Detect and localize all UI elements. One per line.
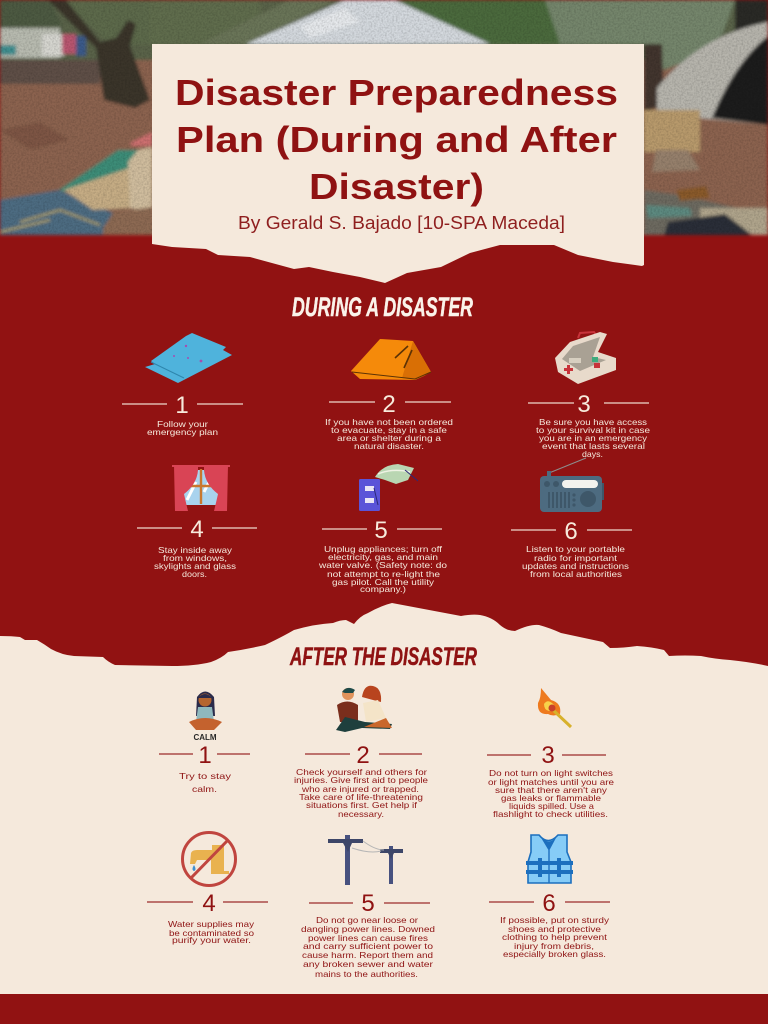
- step 3: survival kit: [528, 332, 650, 459]
- text: days.: [582, 449, 603, 459]
- text: you are in an emergency: [539, 433, 648, 443]
- text: clothing to help prevent: [502, 932, 608, 942]
- icon: two people giving first aid: [336, 686, 392, 732]
- text: necessary.: [338, 809, 384, 819]
- panel: after the disaster, cream area with torn top edge: [0, 603, 768, 994]
- number 6: 6: [542, 890, 556, 917]
- heading: during a disaster: DURING A DISASTER: [292, 292, 473, 322]
- heading: after the disaster: AFTER THE DISASTER: [289, 643, 477, 671]
- text: [500, 915, 610, 959]
- title: [175, 72, 618, 207]
- text: [147, 419, 218, 437]
- text: from windows,: [163, 553, 227, 563]
- text: radio for important: [534, 553, 618, 563]
- text: [154, 545, 236, 579]
- text: purify your water.: [172, 935, 251, 945]
- step 4: purify water: [147, 832, 268, 945]
- text: water valve. (Safety note: do: [318, 560, 447, 570]
- text: area or shelter during a: [337, 433, 441, 443]
- section: during a disaster: [122, 292, 650, 594]
- icon: life vest: [526, 835, 573, 883]
- text: Stay inside away: [158, 545, 233, 555]
- text: company.): [360, 584, 406, 594]
- step 6: portable radio: [511, 458, 632, 579]
- text: liquids spilled. Use a: [509, 801, 594, 811]
- text: or light matches until you are: [488, 777, 614, 787]
- text: flashlight to check utilities.: [493, 809, 608, 819]
- number 2: 2: [356, 742, 370, 769]
- number 2: 2: [382, 391, 396, 418]
- text: power lines can cause fires: [308, 933, 428, 943]
- text: skylights and glass: [154, 561, 236, 571]
- icon: burning match: [538, 688, 571, 727]
- text: [301, 915, 435, 979]
- text: Do not turn on light switches: [489, 768, 613, 778]
- title: Disaster): [309, 166, 484, 207]
- text: updates and instructions: [522, 561, 629, 571]
- step 3: no light switches: [487, 688, 614, 819]
- number 3: 3: [577, 391, 591, 418]
- text: Listen to your portable: [526, 544, 625, 554]
- text: [522, 544, 629, 579]
- title: Disaster Preparedness: [175, 72, 618, 113]
- icon: meditating girl with calm label: CALM: [193, 733, 217, 742]
- text: Follow your: [157, 419, 208, 429]
- text: [536, 417, 650, 459]
- text: event that lasts several: [542, 441, 645, 451]
- step 2: stay in a safe area: [325, 339, 453, 451]
- icon: orange tent: [351, 339, 431, 380]
- step 1: stay calm: [159, 692, 250, 794]
- number 6: 6: [564, 518, 578, 545]
- text: Check yourself and others for: [296, 767, 427, 777]
- section: after the disaster: [147, 643, 614, 979]
- text: If you have not been ordered: [325, 417, 453, 427]
- text: injury from debris,: [514, 941, 594, 951]
- step 4: stay inside: [137, 465, 257, 579]
- number 1: 1: [175, 392, 189, 419]
- text: Try to stay: [179, 771, 232, 781]
- icon: radio: [540, 458, 604, 512]
- number 3: 3: [541, 742, 555, 769]
- number 5: 5: [374, 517, 388, 544]
- text: from local authorities: [530, 569, 622, 579]
- text: who are injured or trapped.: [301, 784, 419, 794]
- step 6: protective clothing: [489, 835, 610, 959]
- text: [168, 919, 255, 945]
- text: natural disaster.: [354, 441, 424, 451]
- number 4: 4: [190, 516, 204, 543]
- number 5: 5: [361, 890, 375, 917]
- text: Water supplies may: [168, 919, 255, 929]
- text: dangling power lines. Downed: [301, 924, 435, 934]
- text: mains to the authorities.: [315, 969, 418, 979]
- icon: first aid kit: [555, 332, 616, 384]
- number 4: 4: [202, 890, 216, 917]
- icon: map: [145, 333, 232, 383]
- text: Take care of life-threatening: [299, 792, 423, 802]
- panel: title card with torn bottom edge: [152, 44, 644, 283]
- text: gas pilot. Call the utility: [332, 577, 435, 587]
- text: to evacuate, stay in a safe: [331, 425, 447, 435]
- text: electricity, gas, and main: [328, 552, 438, 562]
- text: gas leaks or flammable: [501, 793, 601, 803]
- text: [294, 767, 428, 819]
- text: cause harm. Report them and: [302, 950, 433, 960]
- step 2: check for injuries: [294, 686, 428, 819]
- step 5: avoid power lines: [301, 835, 435, 979]
- text: any broken sewer and water: [303, 959, 433, 969]
- text: Unplug appliances; turn off: [324, 544, 443, 554]
- photo: refugee camp tents under olive trees: [0, 0, 768, 235]
- text: [488, 768, 614, 819]
- text: If possible, put on sturdy: [500, 915, 610, 925]
- text: to your survival kit in case: [536, 425, 650, 435]
- byline: By Gerald S. Bajado [10-SPA Maceda]: [238, 213, 565, 233]
- text: doors.: [182, 569, 207, 579]
- icon: window with curtains: [172, 465, 230, 511]
- text: injuries. Give first aid to people: [294, 775, 428, 785]
- text: shoes and protective: [508, 924, 601, 934]
- icon: utility poles: [328, 835, 403, 885]
- number 1: 1: [198, 742, 212, 769]
- text: [325, 417, 453, 451]
- text: situations first. Get help if: [306, 800, 418, 810]
- text: [318, 544, 447, 594]
- text: Be sure you have access: [539, 417, 647, 427]
- icon: hand unplugging outlet: [359, 464, 418, 511]
- text: [179, 771, 232, 794]
- text: and carry sufficient power to: [303, 941, 433, 951]
- text: Do not go near loose or: [316, 915, 418, 925]
- text: sure that there aren't any: [495, 785, 608, 795]
- title: Plan (During and After: [176, 119, 617, 160]
- step 5: unplug appliances: [318, 464, 447, 594]
- icon: no tap water sign: [182, 832, 236, 886]
- text: emergency plan: [147, 427, 218, 437]
- text: not attempt to re-light the: [327, 569, 440, 579]
- step 1: follow your emergency plan: [122, 333, 243, 437]
- text: be contaminated so: [169, 928, 254, 938]
- text: calm.: [192, 784, 217, 794]
- text: especially broken glass.: [503, 949, 606, 959]
